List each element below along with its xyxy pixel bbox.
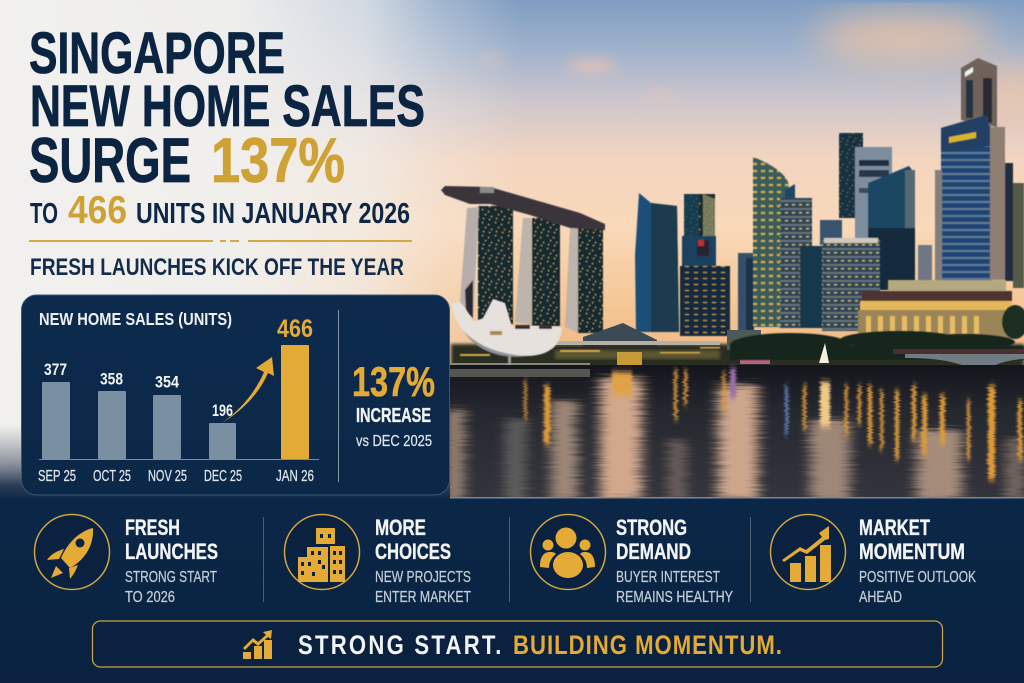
feature: strong demand: BUYER INTEREST (616, 569, 720, 586)
feature: more choices: NEW PROJECTS (375, 569, 471, 586)
title block: SURGE (29, 126, 191, 196)
bar chart: SEP 25 (38, 468, 76, 485)
callout: 137% increase: 137% (352, 358, 435, 405)
feature: market momentum: MARKET (859, 515, 930, 540)
feature: market momentum (770, 514, 977, 606)
icon: buildings (284, 514, 360, 590)
bar chart: 196 (212, 402, 233, 420)
sky clouds (480, 14, 1024, 125)
bar chart: JAN 26 (276, 468, 314, 485)
callout: 137% increase: vs DEC 2025 (356, 433, 432, 450)
title block: NEW HOME SALES (30, 74, 425, 139)
feature: strong demand (530, 514, 733, 606)
title block: UNITS IN JANUARY 2026 (136, 198, 410, 230)
building: Marina Bay Sands (441, 186, 605, 333)
icon: people (530, 514, 606, 590)
banner: tagline: BUILDING MOMENTUM. (513, 631, 782, 661)
bar chart: 377 (44, 361, 67, 379)
feature: strong demand: DEMAND (616, 539, 691, 564)
feature: market momentum: AHEAD (859, 589, 902, 606)
bar chart: 466 (277, 315, 313, 343)
building: central CBD towers (753, 133, 932, 331)
photo: Marina Bay skyline (441, 58, 1024, 378)
feature: fresh launches: LAUNCHES (125, 539, 218, 564)
feature: fresh launches: STRONG START (125, 569, 217, 586)
bar chart (38, 315, 319, 485)
bar chart: 354 (155, 374, 180, 392)
title block: 466 (68, 189, 127, 232)
banner: tagline: STRONG START. (298, 631, 501, 661)
left pale fade (0, 0, 520, 500)
feature: strong demand: STRONG (616, 515, 687, 540)
banner: tagline (92, 621, 942, 667)
feature: fresh launches (34, 514, 218, 606)
building: ArtScience Museum (452, 299, 562, 368)
bridge (893, 349, 1024, 378)
subtitle: FRESH LAUNCHES KICK OFF THE YEAR (30, 254, 404, 281)
title block: TO (30, 198, 58, 230)
ground: waterfront promenade and gardens (451, 323, 1024, 377)
building: tall blue tower and crown (935, 58, 1024, 288)
bar chart: NOV 25 (148, 468, 187, 485)
feature: more choices: MORE (375, 515, 426, 540)
callout: 137% increase: INCREASE (356, 405, 431, 427)
feature: fresh launches: FRESH (125, 515, 180, 540)
title block: 137% (211, 126, 345, 196)
icon: chart arrow (243, 630, 272, 659)
bar chart: DEC 25 (204, 468, 242, 485)
feature: strong demand: REMAINS HEALTHY (616, 589, 733, 606)
feature: more choices (284, 514, 471, 606)
trees (730, 331, 1024, 360)
feature: fresh launches: TO 2026 (125, 589, 175, 606)
bottom band (0, 498, 1024, 683)
feature: market momentum: MOMENTUM (859, 539, 965, 564)
chart heading: NEW HOME SALES (UNITS) (39, 309, 232, 329)
feature: market momentum: POSITIVE OUTLOOK (859, 569, 977, 586)
title divider (29, 240, 412, 242)
building: Fullerton Hotel (858, 280, 1024, 339)
icon: rocket (34, 514, 110, 590)
arrow: growth (222, 357, 274, 423)
left dark fade above band (0, 425, 450, 500)
feature: more choices: ENTER MARKET (375, 589, 471, 606)
feature: more choices: CHOICES (375, 539, 451, 564)
title block (29, 21, 425, 232)
harbour water with reflections (446, 365, 1024, 500)
sailboat (819, 343, 829, 363)
building: towers beside Marina Bay Sands (635, 193, 754, 336)
icon: rising chart (770, 514, 846, 590)
callout: 137% increase (352, 358, 435, 450)
panel: bar chart card (22, 295, 450, 495)
background: sunset sky (0, 0, 1024, 380)
bar chart: OCT 25 (93, 468, 131, 485)
bar chart: 358 (100, 370, 123, 388)
title block: SINGAPORE (29, 21, 285, 86)
